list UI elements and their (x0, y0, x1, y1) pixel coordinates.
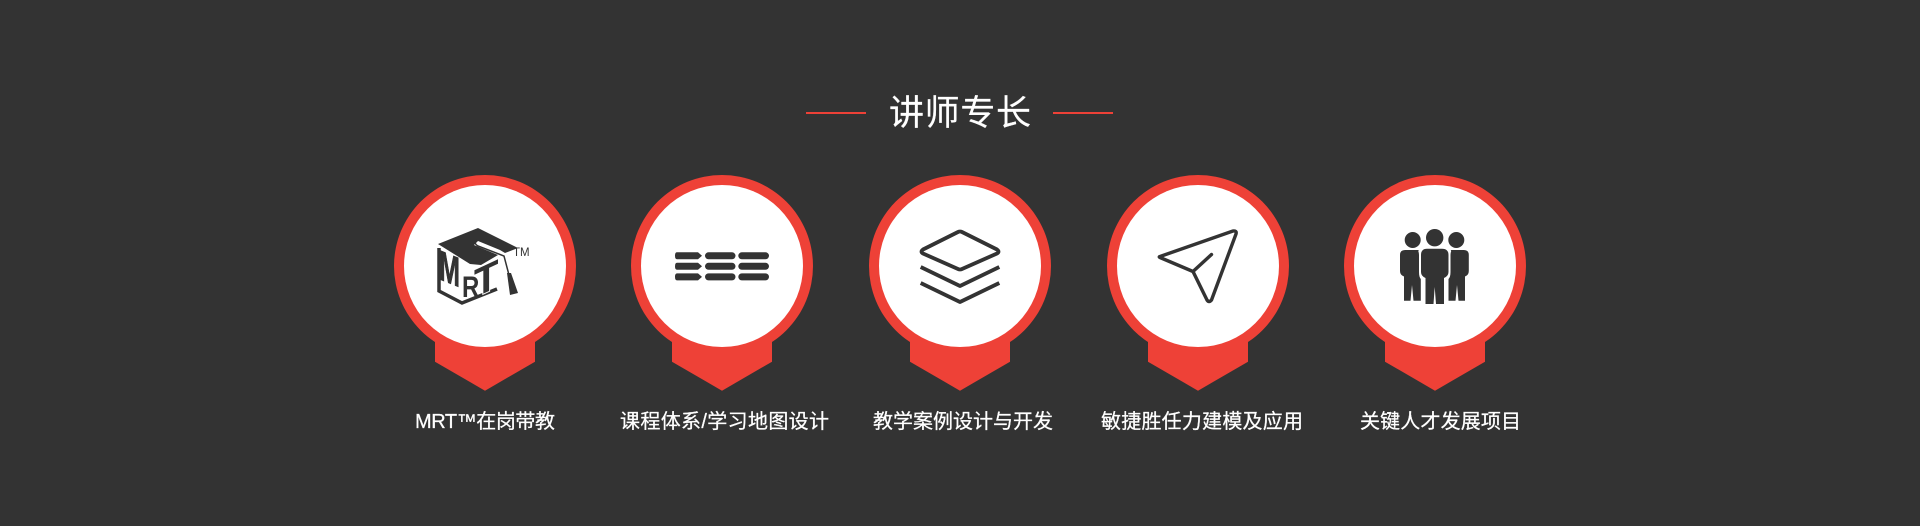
icon: MRT graduation cap: R (462, 269, 480, 304)
icon: MRT graduation cap (438, 228, 530, 307)
panel: 敏捷胜任力建模及应用 (1101, 175, 1303, 433)
label: 关键人才发展项目 (1360, 410, 1521, 433)
marker pin (1107, 175, 1289, 391)
icon: people (1400, 229, 1469, 304)
marker pin (869, 175, 1051, 391)
icon: layers (921, 232, 999, 302)
label: MRT™在岗带教 (415, 410, 555, 433)
icon: paper plane (1159, 231, 1236, 302)
icon: MRT graduation cap: TM (513, 247, 530, 259)
marker pin (1344, 175, 1526, 391)
title: 讲师专长 (889, 94, 1031, 133)
panel: 课程体系/学习地图设计 (620, 175, 829, 433)
icon: MRT graduation cap: M (439, 242, 460, 297)
panel: 关键人才发展项目 (1344, 175, 1526, 433)
label: 课程体系/学习地图设计 (620, 410, 829, 433)
marker pin (394, 175, 576, 391)
label: 敏捷胜任力建模及应用 (1101, 410, 1303, 433)
label: 教学案例设计与开发 (873, 410, 1053, 433)
panel: MRT在岗带教 (394, 175, 576, 433)
icon: MRT graduation cap: T (474, 250, 499, 307)
icon: course rows (675, 252, 769, 280)
marker pin (631, 175, 813, 391)
panel: 教学案例设计与开发 (869, 175, 1053, 433)
